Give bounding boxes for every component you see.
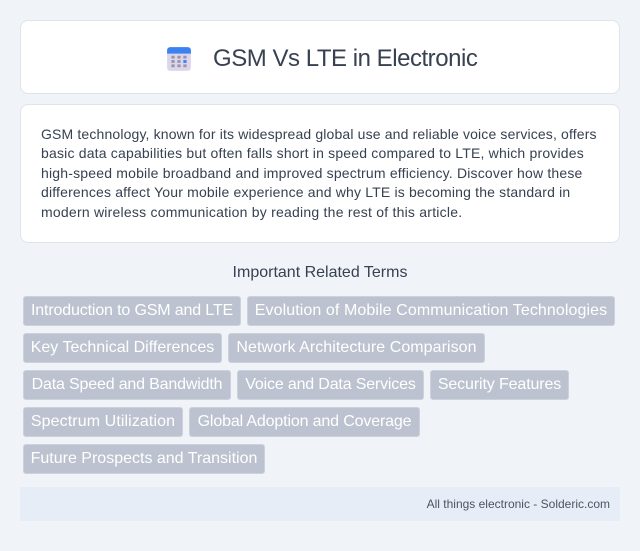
section heading: important related terms: Important Related Terms	[233, 264, 407, 281]
tag: Global Adoption and Coverage	[198, 413, 411, 430]
footer credit: All things electronic - Solderic.com	[427, 497, 610, 511]
title: GSM Vs LTE in Electronic	[213, 45, 477, 72]
tag: Data Speed and Bandwidth	[32, 376, 222, 393]
related terms tag list	[23, 296, 615, 474]
intro paragraph	[41, 126, 597, 220]
intro paragraph: differences affect Your mobile experience and why LTE is becoming the standard in	[41, 184, 570, 200]
tag	[23, 296, 241, 326]
intro paragraph: GSM technology, known for its widespread global use and reliable voice services, offers	[41, 126, 597, 142]
tag: Future Prospects and Transition	[31, 450, 257, 467]
intro paragraph: high-speed mobile broadband and improved spectrum efficiency. Discover how these	[41, 165, 583, 181]
footer bar	[20, 487, 620, 521]
intro paragraph: basic data capabilities but often falls short in speed compared to LTE, which provides	[41, 145, 584, 161]
intro paragraph: modern wireless communication by reading the rest of this article.	[41, 204, 462, 220]
tag	[228, 333, 485, 363]
tag	[189, 407, 420, 437]
tag: Introduction to GSM and LTE	[31, 302, 233, 319]
tag	[237, 370, 424, 400]
intro text panel	[20, 104, 620, 243]
tag: Evolution of Mobile Communication Technologies	[255, 302, 607, 319]
icon: calendar	[167, 47, 191, 71]
tag: Spectrum Utilization	[31, 413, 175, 430]
tag	[247, 296, 615, 326]
title card	[20, 20, 620, 94]
tag	[23, 444, 265, 474]
tag	[23, 370, 231, 400]
tag	[23, 407, 183, 437]
tag: Voice and Data Services	[245, 376, 416, 393]
tag: Key Technical Differences	[31, 339, 214, 356]
tag: Network Architecture Comparison	[236, 339, 477, 356]
tag: Security Features	[438, 376, 561, 393]
tag	[430, 370, 569, 400]
tag	[23, 333, 222, 363]
